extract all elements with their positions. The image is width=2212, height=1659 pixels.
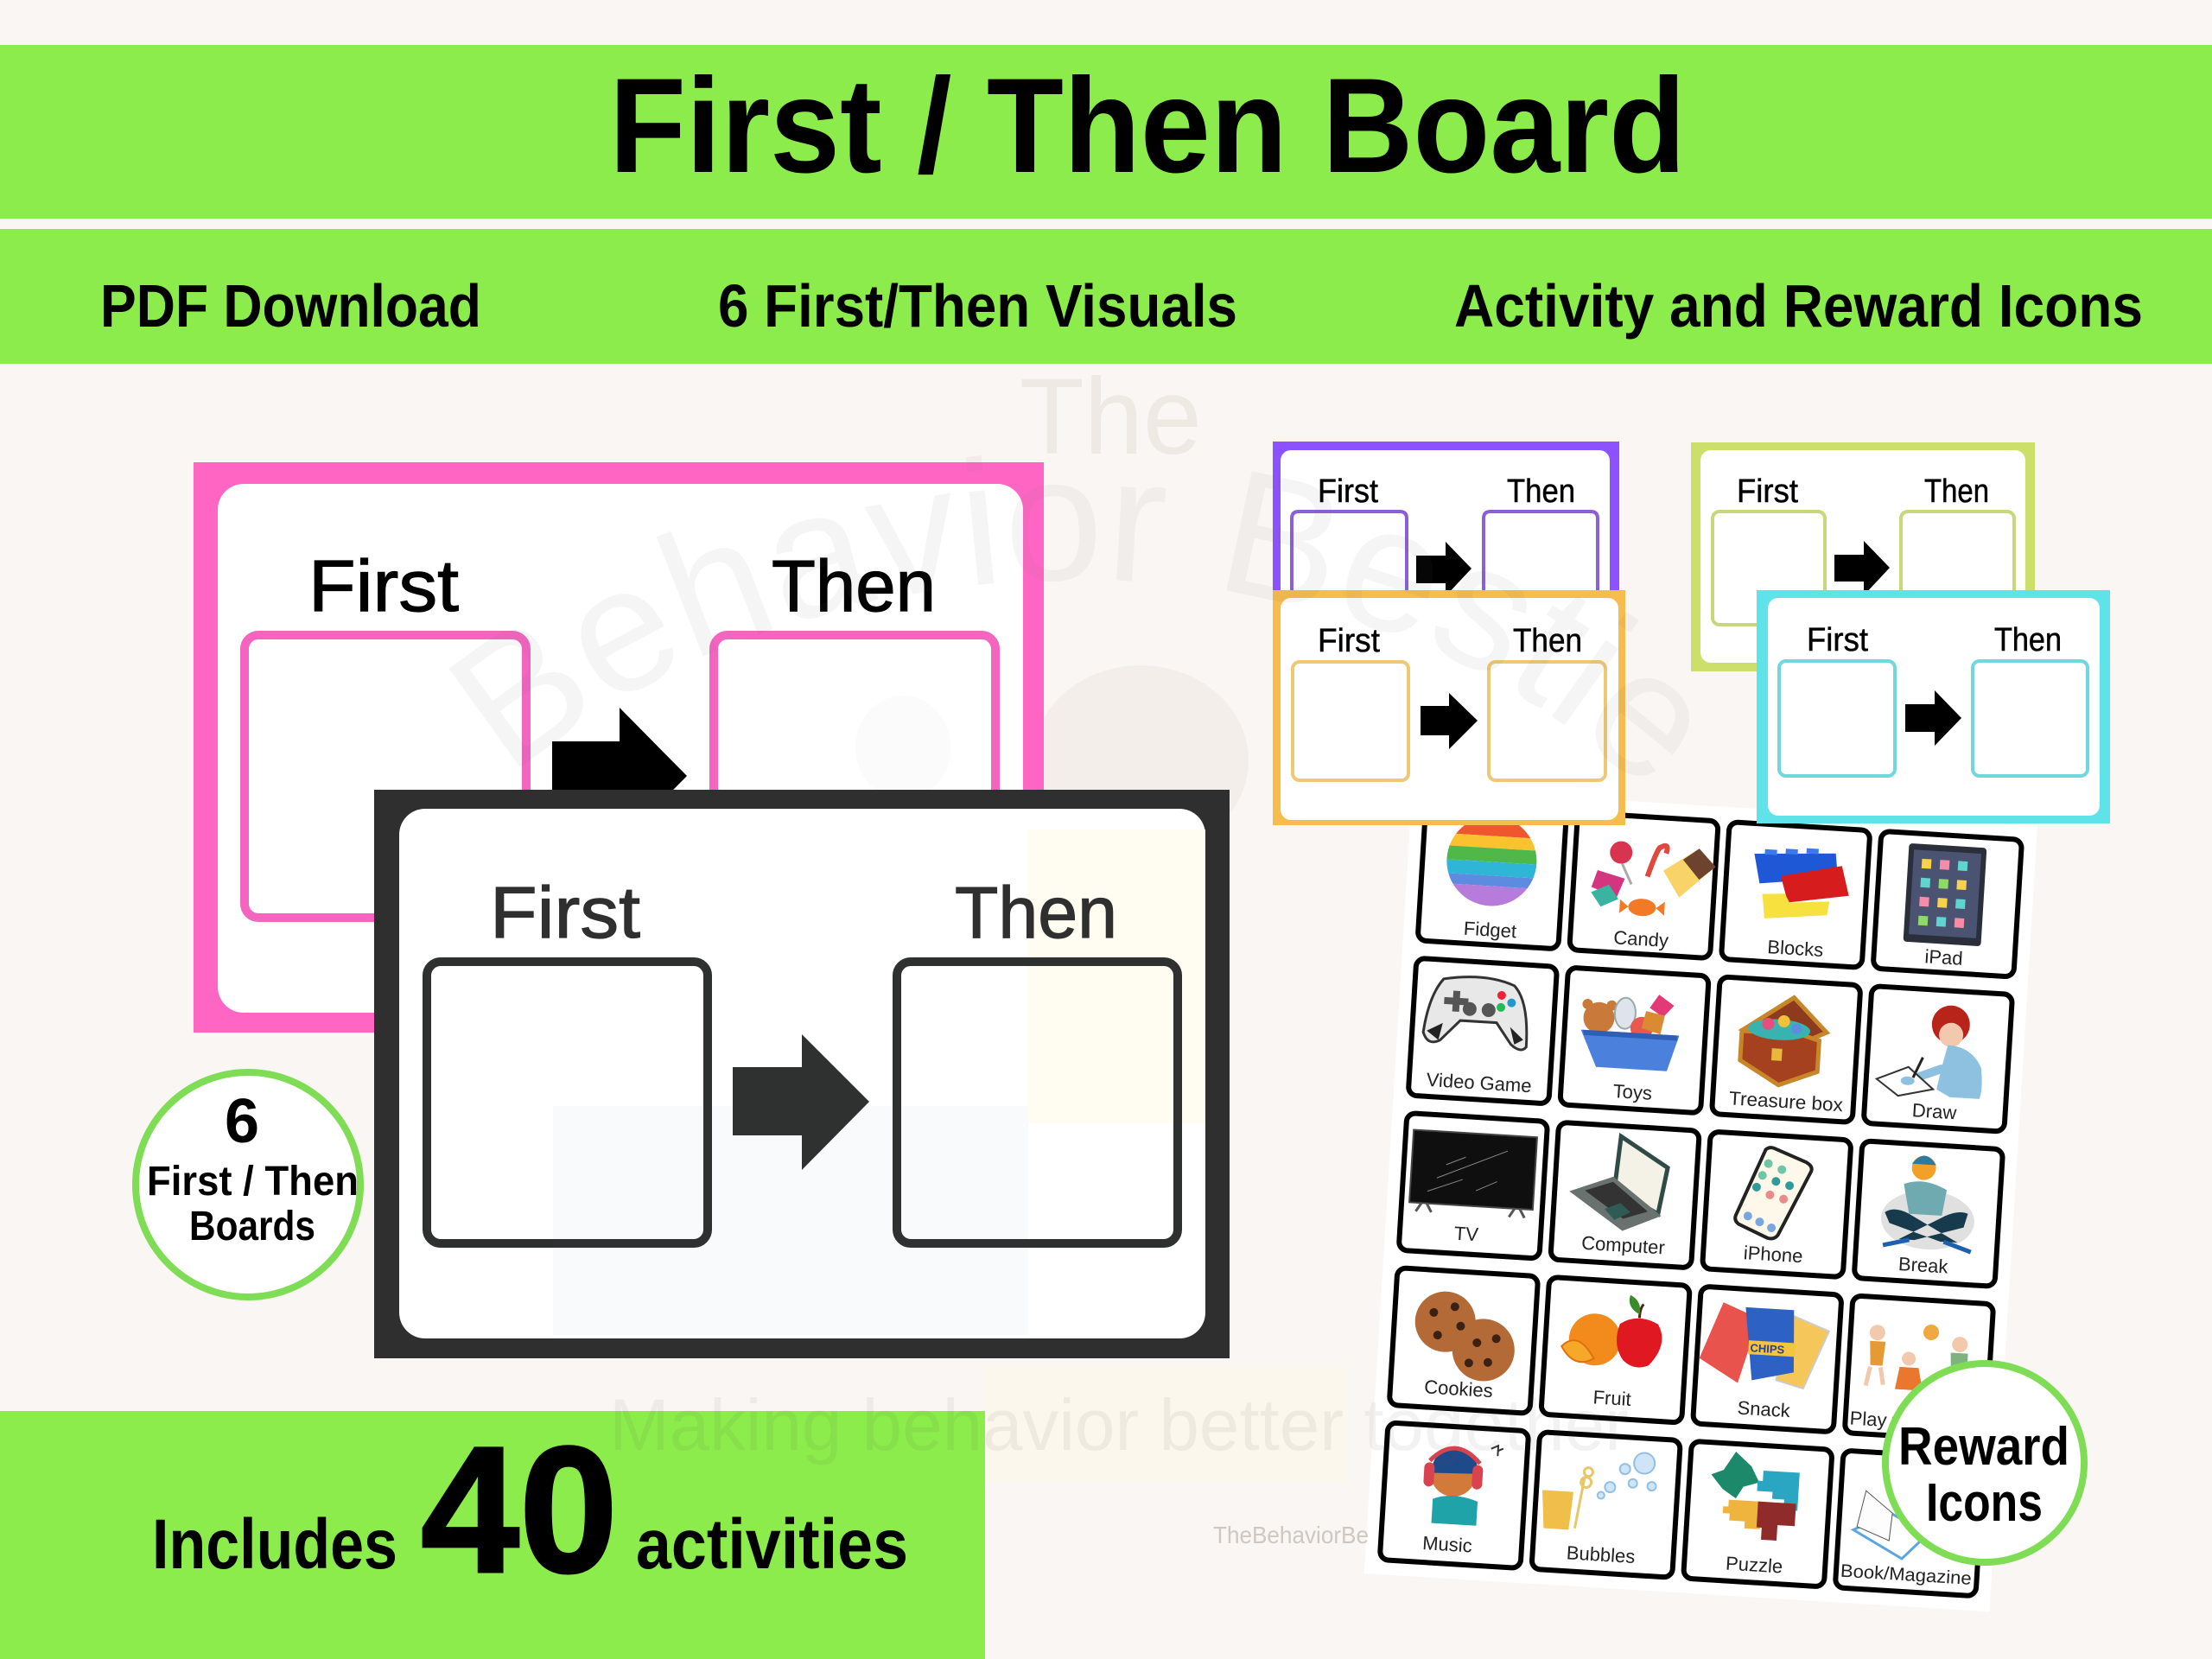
heading: Then: Then — [1924, 474, 1989, 510]
card: candy — [1588, 840, 1717, 954]
cyan small board — [1757, 590, 2110, 823]
card: computer — [1566, 1134, 1671, 1258]
card: play: Play with friends — [1849, 1407, 1988, 1437]
bottom banner — [0, 1410, 985, 1659]
arrow — [1421, 693, 1478, 749]
banner: activities: activities — [636, 1505, 908, 1584]
heading: First: First — [1318, 474, 1378, 510]
card: cookies — [1410, 1290, 1518, 1403]
watermark overlay — [449, 456, 1688, 1548]
card: fruit — [1558, 1291, 1664, 1412]
badge: reward icons — [1885, 1363, 2084, 1562]
watermark: site name: TheBehaviorBe — [1213, 1522, 1369, 1548]
board tint: faded figure legs — [553, 1106, 1028, 1335]
banner: 40: 40 — [421, 1410, 618, 1611]
badge text line 2: Boards — [189, 1204, 315, 1249]
then box — [714, 635, 995, 918]
heading: First: First — [1807, 622, 1868, 658]
arrow — [1834, 541, 1890, 595]
card: fidget — [1446, 825, 1536, 940]
card: break: Break — [1897, 1253, 1949, 1278]
arrow — [733, 1034, 869, 1170]
banner: includes: Includes — [152, 1505, 397, 1584]
lime small board — [1691, 442, 2035, 671]
card: toys: Toys — [1612, 1080, 1653, 1104]
card: computer: Computer — [1581, 1232, 1665, 1258]
watermark: The: The — [1020, 357, 1202, 477]
card: fidget: Fidget — [1463, 918, 1517, 942]
card: fruit: Fruit — [1592, 1386, 1631, 1410]
feature: PDF download: PDF Download — [100, 272, 481, 340]
watermark: background hair shape — [1033, 665, 1249, 855]
card: ipad — [1902, 843, 1986, 970]
watermark: tagline: Making behavior better together — [609, 1384, 1629, 1465]
card: candy: Candy — [1613, 926, 1669, 951]
badge number: 6 — [225, 1087, 259, 1156]
watermark: cream footer block — [985, 1365, 1348, 1482]
heading: Then: Then — [1994, 622, 2062, 658]
heading: First: First — [490, 872, 640, 953]
card: snack: CHIPS — [1750, 1341, 1785, 1357]
then box — [1489, 662, 1605, 780]
heading: First: First — [1318, 623, 1380, 659]
card: iphone — [1732, 1146, 1813, 1268]
then box — [1973, 661, 2088, 776]
card: draw: Draw — [1911, 1099, 1957, 1123]
first box — [1713, 512, 1825, 625]
card: ipad: iPad — [1924, 945, 1963, 969]
card: video game — [1420, 974, 1538, 1096]
first box — [427, 962, 708, 1243]
card: tv — [1407, 1130, 1537, 1249]
badge text line 1: Reward — [1898, 1417, 2069, 1477]
watermark: arched name: Behavior Bestie — [449, 456, 1688, 776]
card: puzzle — [1706, 1450, 1801, 1578]
heading: Then: Then — [955, 872, 1117, 953]
card: toys — [1577, 990, 1681, 1105]
first box — [245, 635, 526, 918]
card: music — [1419, 1441, 1503, 1558]
card: break — [1878, 1154, 1978, 1279]
reward icon sheet — [1364, 788, 2037, 1611]
title band — [0, 45, 2212, 219]
arrow — [1905, 690, 1961, 746]
card: snack: Snack — [1737, 1397, 1792, 1421]
card: iphone: iPhone — [1743, 1242, 1803, 1267]
badge: 6 boards — [136, 1072, 360, 1297]
card: tv: TV — [1453, 1223, 1479, 1245]
card: draw — [1874, 1001, 1986, 1125]
arrow — [1416, 542, 1471, 596]
card: play — [1849, 1320, 1994, 1437]
watermark: faded head — [855, 696, 950, 799]
card: treasure box — [1728, 994, 1849, 1116]
card: bubbles: Bubbles — [1566, 1541, 1636, 1567]
feature band — [0, 229, 2212, 364]
card: puzzle: Puzzle — [1725, 1553, 1783, 1578]
heading: First: First — [308, 545, 459, 626]
heading: Then: Then — [1507, 474, 1575, 510]
feature: icons: Activity and Reward Icons — [1454, 272, 2143, 340]
board tint: faded figure shirt — [1028, 830, 1205, 1123]
dark first/then board — [374, 790, 1230, 1358]
card: book — [1840, 1490, 1976, 1589]
card: book: Book/Magazine — [1840, 1561, 1972, 1589]
first box — [1779, 661, 1895, 776]
heading: Then: Then — [1513, 623, 1582, 659]
card: snack — [1696, 1301, 1830, 1424]
heading: First: First — [1737, 474, 1798, 510]
boxes — [1292, 512, 1598, 622]
title: First / Then Board — [609, 51, 1686, 201]
arrow — [552, 708, 687, 844]
then box — [1901, 512, 2014, 625]
feature: visuals count: 6 First/Then Visuals — [718, 272, 1237, 340]
pink first/then board — [194, 462, 1044, 1033]
card: blocks: Blocks — [1767, 936, 1824, 961]
card: music: Music — [1422, 1532, 1472, 1557]
card: video game: Video Game — [1426, 1069, 1532, 1096]
badge text line 1: First / Then — [147, 1159, 359, 1205]
orange small board — [1273, 590, 1625, 825]
first box — [1293, 662, 1408, 780]
purple small board — [1273, 442, 1619, 666]
badge text line 2: Icons — [1926, 1473, 2043, 1533]
then box — [897, 962, 1178, 1243]
card: cookies: Cookies — [1424, 1376, 1493, 1402]
card: bubbles — [1538, 1446, 1658, 1568]
heading: Then: Then — [772, 545, 936, 626]
card: treasure box: Treasure box — [1728, 1087, 1844, 1116]
card: blocks — [1748, 845, 1852, 963]
